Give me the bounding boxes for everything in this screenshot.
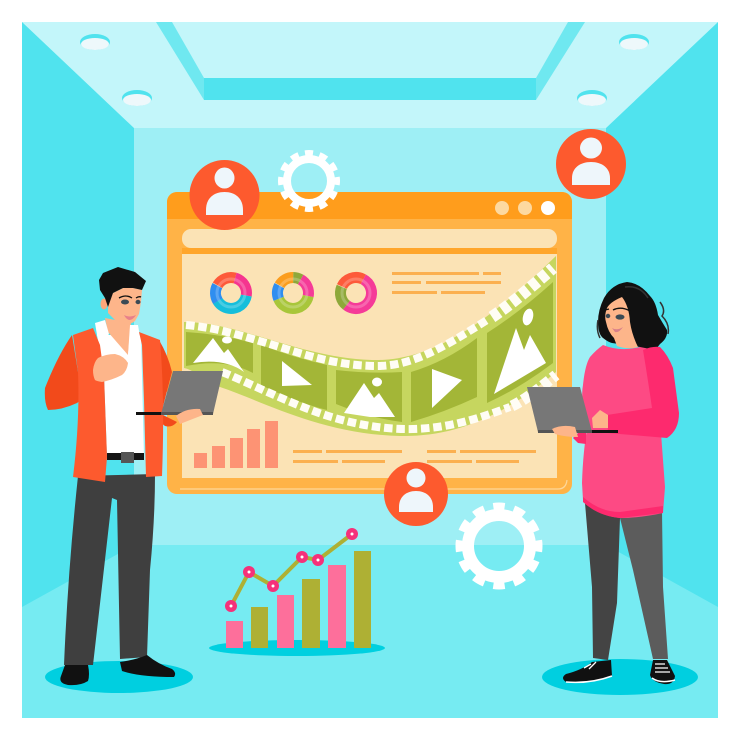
content area bbox=[182, 248, 557, 478]
shoes bbox=[563, 660, 675, 684]
shirt bbox=[97, 335, 144, 457]
text lines top right bbox=[392, 272, 501, 294]
panel: dashboard window bbox=[167, 192, 572, 494]
strip base bbox=[184, 256, 556, 436]
trend points bbox=[225, 528, 358, 612]
play icon 2 bbox=[432, 369, 462, 408]
laptop bbox=[527, 387, 618, 433]
window control dots bbox=[495, 201, 555, 215]
donut chart 2 bbox=[272, 272, 314, 314]
neck and face bbox=[605, 297, 638, 348]
figure: man with laptop bbox=[45, 267, 223, 693]
hair back bbox=[598, 282, 667, 352]
neck bbox=[105, 318, 131, 355]
collar bbox=[95, 320, 141, 355]
mountain icon 2 bbox=[344, 378, 395, 417]
bars bbox=[226, 551, 371, 648]
hands bbox=[552, 410, 608, 437]
fist hand bbox=[93, 354, 128, 382]
figure: woman with laptop bbox=[527, 282, 698, 695]
floor shadow bbox=[542, 659, 698, 695]
trend line bbox=[231, 534, 352, 606]
holding hand bbox=[176, 409, 203, 424]
head bbox=[99, 267, 146, 324]
sweater bbox=[582, 345, 665, 518]
right sleeve bbox=[607, 347, 679, 438]
donut chart 3 bbox=[335, 272, 377, 314]
left sleeve bbox=[573, 425, 586, 444]
address bar bbox=[182, 229, 557, 248]
text lines bottom bbox=[293, 450, 536, 463]
window frame bbox=[167, 192, 572, 494]
icon: user avatar bottom bbox=[384, 462, 448, 526]
icon: gear large bbox=[460, 507, 538, 585]
icon: gear small bbox=[281, 153, 337, 209]
donut chart 1 bbox=[210, 272, 252, 314]
icon: user avatar right bbox=[556, 129, 626, 199]
ceiling lights bbox=[80, 34, 649, 106]
mountain icon 1 bbox=[193, 336, 244, 372]
shoes bbox=[60, 655, 175, 685]
left leg bbox=[585, 503, 620, 660]
play icon 1 bbox=[282, 361, 312, 386]
mountain icon 3 bbox=[494, 307, 546, 394]
facial features bbox=[605, 308, 630, 332]
film strip bbox=[184, 256, 556, 436]
right sleeve bbox=[155, 340, 177, 426]
top sprocket holes bbox=[186, 320, 487, 366]
film frames bbox=[186, 282, 553, 422]
laptop bbox=[136, 371, 223, 415]
left sleeve bbox=[45, 335, 98, 410]
chart base shadow bbox=[209, 640, 385, 656]
sweater hem bbox=[583, 497, 663, 518]
jacket left panel bbox=[73, 328, 107, 482]
jacket right panel bbox=[139, 332, 163, 477]
icon: user avatar left bbox=[190, 160, 260, 230]
trousers bbox=[64, 474, 155, 665]
small bar chart bbox=[194, 421, 278, 468]
belt bbox=[107, 452, 144, 463]
bottom sprocket holes bbox=[222, 372, 510, 429]
chart: floor bar and line chart bbox=[209, 528, 385, 656]
floor shadow bbox=[45, 661, 193, 693]
hair curls bbox=[597, 287, 668, 338]
right leg bbox=[620, 511, 668, 659]
